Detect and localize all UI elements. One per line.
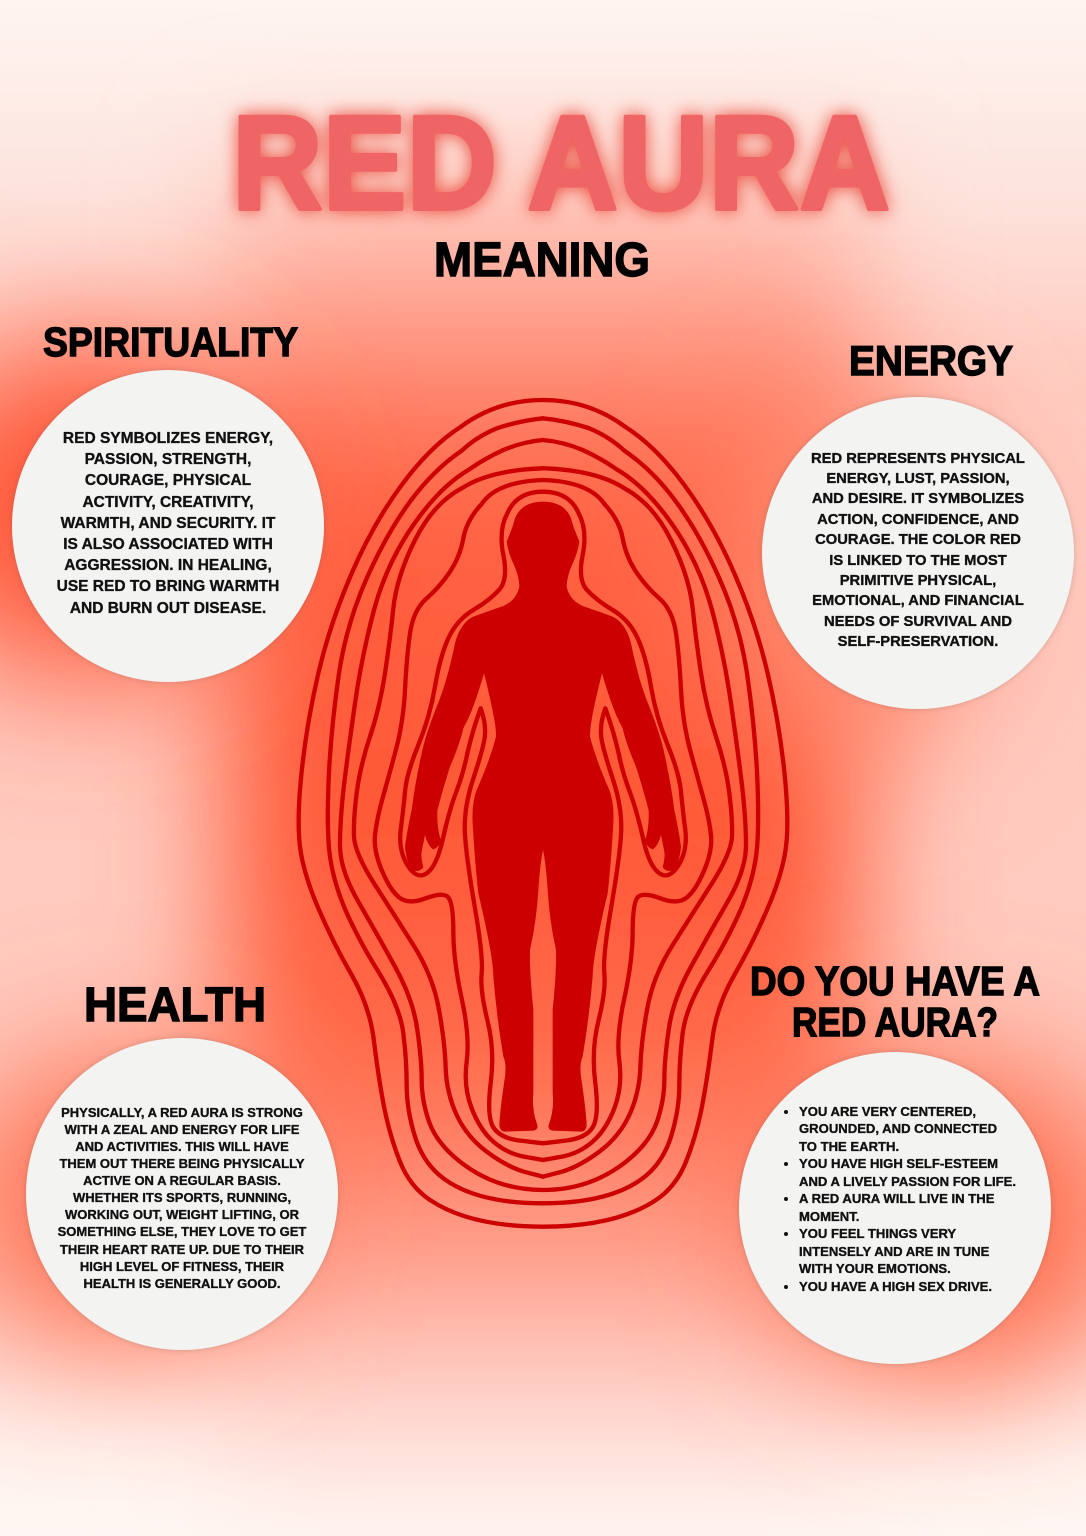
health text: THEIR HEART RATE UP. DUE TO THEIR [60, 1242, 304, 1256]
health text: AND ACTIVITIES. THIS WILL HAVE [75, 1139, 289, 1154]
energy text: AND DESIRE. IT SYMBOLIZES [812, 491, 1024, 507]
health text: HEALTH IS GENERALLY GOOD. [84, 1276, 280, 1291]
health text: WHETHER ITS SPORTS, RUNNING, [73, 1190, 291, 1205]
panel: health circle [26, 1038, 338, 1350]
checklist text: YOU HAVE HIGH SELF-ESTEEM [799, 1156, 998, 1171]
energy text: RED REPRESENTS PHYSICAL [811, 450, 1025, 466]
checklist text: MOMENT. [799, 1209, 859, 1224]
contour line 2 [375, 480, 711, 1160]
checklist text: YOU ARE VERY CENTERED, [799, 1104, 976, 1119]
health text: THEM OUT THERE BEING PHYSICALLY [59, 1156, 305, 1171]
heading: DO YOU HAVE A RED AURA?: RED AURA? [792, 999, 998, 1045]
energy text: EMOTIONAL, AND FINANCIAL [812, 593, 1024, 609]
energy text [811, 450, 1025, 650]
energy text: IS LINKED TO THE MOST [829, 553, 1007, 569]
spirituality text: IS ALSO ASSOCIATED WITH [63, 536, 273, 553]
spirituality text: AGGRESSION. IN HEALING, [64, 557, 272, 574]
checklist text: A RED AURA WILL LIVE IN THE [799, 1191, 994, 1206]
heading: SPIRITUALITY: SPIRITUALITY [43, 319, 298, 365]
contour line 4 [340, 440, 746, 1190]
checklist text: AND A LIVELY PASSION FOR LIFE. [799, 1174, 1016, 1189]
health text: PHYSICALLY, A RED AURA IS STRONG [61, 1104, 303, 1120]
heading: DO YOU HAVE A RED AURA? [750, 958, 1040, 1045]
spirituality text [57, 430, 279, 617]
spirituality text: USE RED TO BRING WARMTH [57, 578, 279, 595]
energy text: ENERGY, LUST, PASSION, [826, 471, 1010, 487]
panel: do you have a red aura circle [739, 1052, 1051, 1364]
subtitle: MEANING: MEANING [434, 234, 650, 287]
health text [58, 1104, 306, 1291]
energy text: SELF-PRESERVATION. [838, 634, 998, 650]
contour line 6 (outermost) [299, 400, 787, 1227]
energy text: COURAGE. THE COLOR RED [815, 532, 1021, 548]
contour line 5 [328, 418, 758, 1203]
spirituality text: RED SYMBOLIZES ENERGY, [63, 430, 273, 447]
health text: ACTIVE ON A REGULAR BASIS. [83, 1173, 281, 1188]
title: RED AURA: RED AURA [232, 89, 890, 238]
contour line 1 (innermost) [400, 492, 686, 1143]
contour line 3 [354, 468, 732, 1177]
checklist text: YOU FEEL THINGS VERY [799, 1226, 956, 1241]
checklist text [784, 1104, 1016, 1294]
heading: DO YOU HAVE A RED AURA?: DO YOU HAVE A [750, 958, 1040, 1004]
checklist text: GROUNDED, AND CONNECTED [799, 1121, 997, 1136]
heading: HEALTH: HEALTH [84, 979, 266, 1032]
energy text: ACTION, CONFIDENCE, AND [817, 512, 1019, 528]
panel: energy circle [762, 397, 1074, 709]
energy text: PRIMITIVE PHYSICAL, [840, 573, 996, 589]
energy text: NEEDS OF SURVIVAL AND [824, 614, 1012, 630]
checklist text: INTENSELY AND ARE IN TUNE [799, 1244, 989, 1259]
health text: HIGH LEVEL OF FITNESS, THEIR [80, 1259, 284, 1274]
health text: SOMETHING ELSE, THEY LOVE TO GET [58, 1224, 306, 1239]
spirituality text: ACTIVITY, CREATIVITY, [82, 494, 254, 511]
spirituality text: PASSION, STRENGTH, [85, 451, 251, 468]
heading: ENERGY: ENERGY [849, 337, 1013, 384]
body silhouette [405, 502, 681, 1132]
health text: WITH A ZEAL AND ENERGY FOR LIFE [65, 1122, 299, 1137]
checklist text: YOU HAVE A HIGH SEX DRIVE. [799, 1279, 992, 1294]
spirituality text: COURAGE, PHYSICAL [85, 472, 251, 489]
health text: WORKING OUT, WEIGHT LIFTING, OR [65, 1207, 299, 1222]
checklist text: WITH YOUR EMOTIONS. [799, 1261, 951, 1276]
panel: spirituality circle [12, 370, 324, 682]
spirituality text: AND BURN OUT DISEASE. [70, 600, 266, 617]
checklist text: TO THE EARTH. [799, 1139, 899, 1154]
spirituality text: WARMTH, AND SECURITY. IT [61, 515, 275, 532]
